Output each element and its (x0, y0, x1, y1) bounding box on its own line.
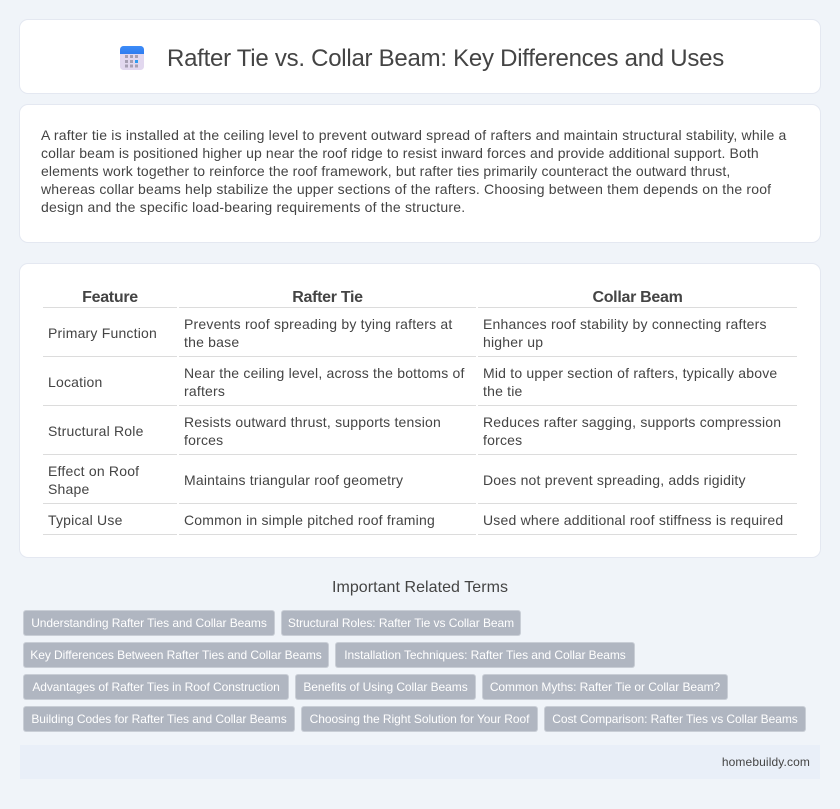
related term tags: Advantages of Rafter Ties in Roof Construction (32, 680, 280, 694)
header panel (20, 20, 820, 93)
related term tags (23, 610, 806, 732)
related term tags: Structural Roles: Rafter Tie vs Collar Beam (288, 616, 514, 630)
panel: comparison table (20, 264, 820, 557)
panel: summary paragraph: whereas collar beams help stabilize the upper sections of the rafters. Choosing between them depends on the roof (41, 181, 771, 197)
row: location: Near the ceiling level, across the bottoms of (184, 365, 465, 381)
panel: summary paragraph: elements work together to reinforce the roof framework, but rafter ties primarily counteract the outward thrust, (41, 163, 730, 179)
row: typical use: Used where additional roof stiffness is required (483, 512, 783, 528)
row: primary function: Primary Function (48, 325, 157, 341)
row: structural role: forces (483, 432, 522, 448)
row: structural role: forces (184, 432, 223, 448)
panel: summary paragraph: design and the specific load-bearing requirements of the structure. (41, 199, 465, 215)
related term tags: Benefits of Using Collar Beams (303, 680, 468, 694)
row: effect on roof shape: Effect on Roof (48, 463, 139, 479)
comparison table (43, 289, 797, 535)
row: effect on roof shape: Does not prevent spreading, adds rigidity (483, 472, 746, 488)
row: effect on roof shape: Maintains triangular roof geometry (184, 472, 403, 488)
row: location: Location (48, 374, 103, 390)
row: structural role (48, 414, 781, 448)
row: primary function: the base (184, 334, 239, 350)
row: primary function: higher up (483, 334, 543, 350)
heading: related terms: Important Related Terms (332, 579, 508, 596)
panel: summary paragraph: collar beam is positioned higher up near the roof ridge to resist inward forces and provide additional support. Both (41, 145, 759, 161)
related term tags: Common Myths: Rafter Tie or Collar Beam? (490, 680, 720, 694)
table header: Collar Beam (592, 289, 683, 306)
related term tags: Understanding Rafter Ties and Collar Beams (31, 616, 267, 630)
table header (82, 289, 683, 306)
row: effect on roof shape: Shape (48, 481, 89, 497)
related term tags: Choosing the Right Solution for Your Roof (310, 712, 529, 726)
panel: summary paragraph: A rafter tie is installed at the ceiling level to prevent outward spread of rafters and maintain structural stability, while a (41, 127, 787, 143)
related term tags: Installation Techniques: Rafter Ties and Collar Beams (344, 648, 626, 662)
row: structural role: Resists outward thrust, supports tension (184, 414, 441, 430)
row: location (48, 365, 777, 399)
footer bar (20, 745, 820, 779)
title: Rafter Tie vs. Collar Beam: Key Differences and Uses (167, 45, 724, 72)
row: primary function (48, 316, 767, 350)
row: primary function: Enhances roof stability by connecting rafters (483, 316, 767, 332)
table header: Rafter Tie (292, 289, 363, 306)
related term tags: Building Codes for Rafter Ties and Collar Beams (31, 712, 287, 726)
footer source text: homebuildy.com (722, 755, 810, 769)
row: effect on roof shape (48, 463, 746, 497)
row: primary function: Prevents roof spreading by tying rafters at (184, 316, 453, 332)
table header: Feature (82, 289, 138, 306)
row: structural role: Structural Role (48, 423, 144, 439)
row: typical use (48, 512, 783, 528)
row: location: rafters (184, 383, 225, 399)
row: typical use: Common in simple pitched roof framing (184, 512, 435, 528)
related term tags: Key Differences Between Rafter Ties and Collar Beams (30, 648, 322, 662)
row: location: Mid to upper section of rafters, typically above (483, 365, 777, 381)
panel: summary paragraph (20, 105, 820, 242)
row: typical use: Typical Use (48, 512, 123, 528)
icon: calendar (120, 46, 144, 70)
row: location: the tie (483, 383, 523, 399)
row: structural role: Reduces rafter sagging, supports compression (483, 414, 781, 430)
related term tags: Cost Comparison: Rafter Ties vs Collar Beams (552, 712, 798, 726)
